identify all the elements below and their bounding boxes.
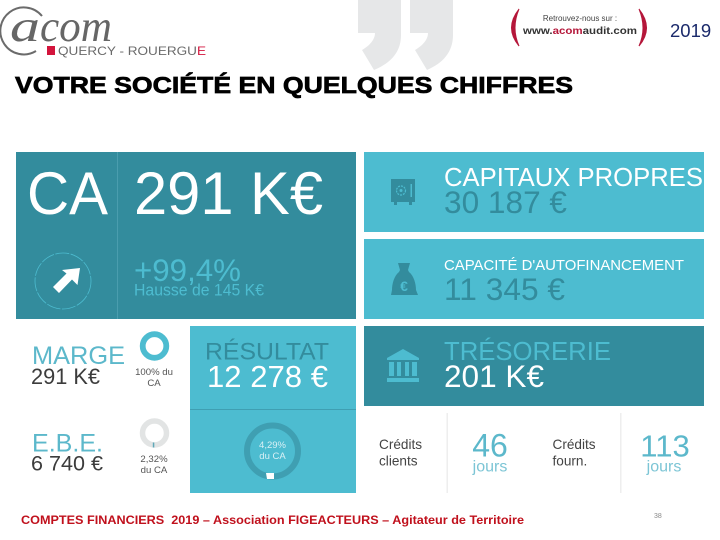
panel: résultat: RÉSULTAT [205,338,329,366]
panel: E.B.E.: du CA [141,465,168,476]
stat: crédits fournisseurs: jours [646,458,681,476]
page number: 38 [654,513,662,520]
panel: capitaux propres: 30 187 € [444,184,567,220]
website badge [512,9,646,46]
website badge: Retrouvez-nous sur : [543,14,617,23]
stat: crédits fournisseurs [552,413,690,493]
panel: marge: 100% du [135,367,173,378]
ring: 4,29%: du CA [259,451,286,462]
panel: capacité d'autofinancement: CAPACITÉ D'AUTOFINANCEMENT [444,257,684,274]
panel: capacité d'autofinancement: 11 345 € [444,271,565,307]
panel: marge [31,334,173,389]
panel: E.B.E.: 2,32% [140,454,168,465]
stat: crédits clients: 46 [472,428,508,464]
stat: crédits fournisseurs: Crédits [552,437,596,452]
icon: bank [387,349,419,382]
panel: chiffre d'affaires: CA [27,160,108,227]
ring: 2,32% [142,421,166,448]
panel: marge: 291 K€ [31,364,100,389]
stat: crédits clients: Crédits [379,437,422,452]
stat: crédits clients: jours [472,458,507,476]
stat: crédits fournisseurs: fourn. [552,454,587,468]
panel: E.B.E.: 6 740 € [31,450,103,476]
panel: chiffre d'affaires: +99,4% [134,252,241,288]
panel: trésorerie: 201 K€ [444,358,544,394]
stat: crédits clients: clients [379,454,418,468]
panel: chiffre d'affaires: 291 K€ [134,160,323,227]
panel: marge: CA [147,378,161,389]
logo: acom Quercy-Rouergue: com [40,2,112,51]
website badge: www. acom audit.com [522,26,637,37]
icon: safe [391,179,415,205]
panel: capacité d'autofinancement [364,239,704,319]
logo: acom Quercy-Rouergue: a [10,2,40,51]
ring: 4,29%: 4,29% [259,440,287,451]
panel: capitaux propres: CAPITAUX PROPRES [444,162,703,192]
panel: E.B.E.: E.B.E. [32,430,103,458]
icon: rising arrow [35,253,91,309]
ring: 100% [143,334,166,358]
panel: chiffre d'affaires [16,152,356,319]
panel: résultat: 12 278 € [207,359,328,394]
title: VOTRE SOCIÉTÉ EN QUELQUES CHIFFRES [15,71,573,98]
panel: capitaux propres [364,152,704,232]
logo: acom Quercy-Rouergue: QUERCY - ROUERGU E [58,44,206,58]
stat: crédits clients [379,413,508,493]
icon: money bag: € [400,278,408,294]
ring: 4,29% [247,426,298,479]
logo: acom Quercy-Rouergue [0,2,206,58]
year: 2019 [670,20,711,41]
panel: résultat [190,326,356,493]
stat: crédits fournisseurs: 113 [640,428,690,464]
footer caption: COMPTES FINANCIERS 2019 – Association FIGEACTEURS – Agitateur de Territoire [21,513,524,527]
panel: chiffre d'affaires: Hausse de 145 K€ [134,282,264,300]
panel: trésorerie [364,326,704,406]
icon: money bag [391,263,418,295]
panel: E.B.E. [31,421,168,476]
decorative quotation mark [358,0,453,70]
panel: marge: MARGE [32,342,125,370]
panel: trésorerie: TRÉSORERIE [444,337,611,366]
